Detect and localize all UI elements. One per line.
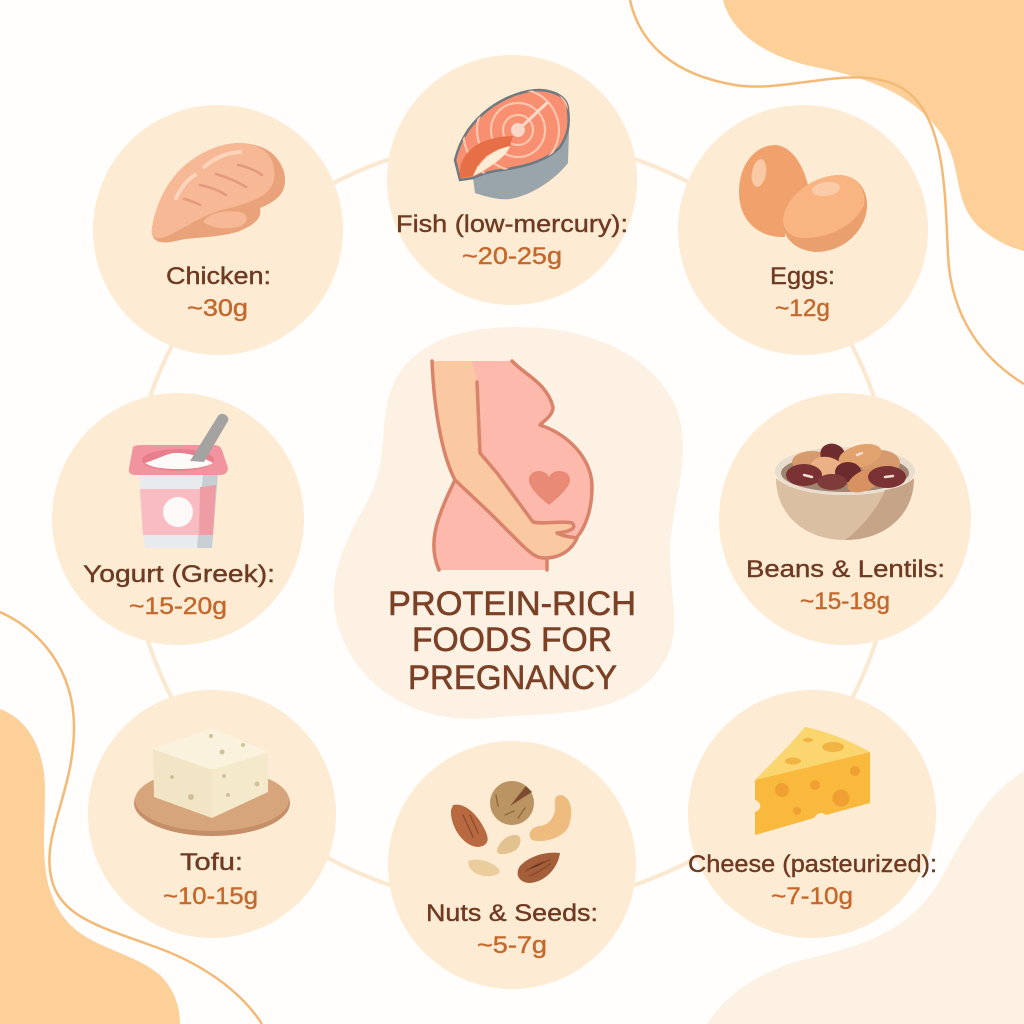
- arm: [432, 361, 577, 558]
- value: ~7-10g: [771, 883, 853, 910]
- pale seed: [468, 860, 500, 876]
- decorative blob: bottom left: [0, 709, 180, 1024]
- heart: [529, 471, 570, 505]
- icon: eggs: [739, 145, 867, 252]
- icon: salmon steak: [454, 88, 570, 200]
- value: ~30g: [187, 295, 248, 322]
- title: FOODS FOR: [412, 621, 612, 659]
- title: PREGNANCY: [408, 659, 617, 697]
- value: ~20-25g: [462, 243, 562, 270]
- icon: bean bowl: [775, 440, 915, 540]
- walnut: [490, 781, 534, 825]
- label: Beans & Lentils:: [746, 556, 945, 583]
- panel: cheese: [688, 690, 937, 938]
- pregnant figure icon: [432, 361, 592, 570]
- icon: chicken breast: [152, 143, 285, 242]
- decorative blob: bottom right: [707, 771, 1024, 1024]
- icon: nuts: [451, 781, 571, 883]
- panel: fish: [387, 55, 637, 305]
- label: Chicken:: [166, 263, 271, 290]
- value: ~15-20g: [129, 593, 227, 620]
- label: Yogurt (Greek):: [83, 561, 275, 588]
- panel: chicken: [93, 105, 343, 355]
- panel: beans: [719, 393, 971, 645]
- cashew: [530, 795, 571, 841]
- icon: tofu: [134, 728, 290, 836]
- label: Cheese (pasteurized):: [688, 851, 937, 878]
- panel: nuts: [388, 741, 636, 989]
- title: PROTEIN-RICH: [388, 585, 636, 623]
- label: Fish (low-mercury):: [396, 211, 628, 238]
- panel: eggs: [678, 105, 928, 355]
- title: [388, 585, 636, 697]
- label: Nuts & Seeds:: [426, 900, 598, 927]
- icon: yogurt cup: [129, 414, 228, 548]
- center blob: [334, 327, 683, 719]
- value: ~12g: [775, 295, 830, 322]
- icon: cheese: [755, 727, 870, 835]
- panel: yogurt: [52, 393, 304, 645]
- small seed: [497, 835, 521, 854]
- decorative line: bottom left: [0, 612, 262, 1024]
- almond left: [451, 805, 488, 847]
- label: Tofu:: [180, 849, 243, 876]
- panel: tofu: [88, 690, 336, 938]
- decorative blob: top right: [723, 0, 1024, 251]
- value: ~5-7g: [477, 932, 547, 959]
- value: ~10-15g: [163, 883, 258, 910]
- decorative line: top right: [630, 0, 1024, 384]
- connecting ring: [129, 139, 895, 905]
- almond right: [518, 853, 560, 883]
- label: Eggs:: [770, 263, 835, 290]
- value: ~15-18g: [800, 588, 890, 615]
